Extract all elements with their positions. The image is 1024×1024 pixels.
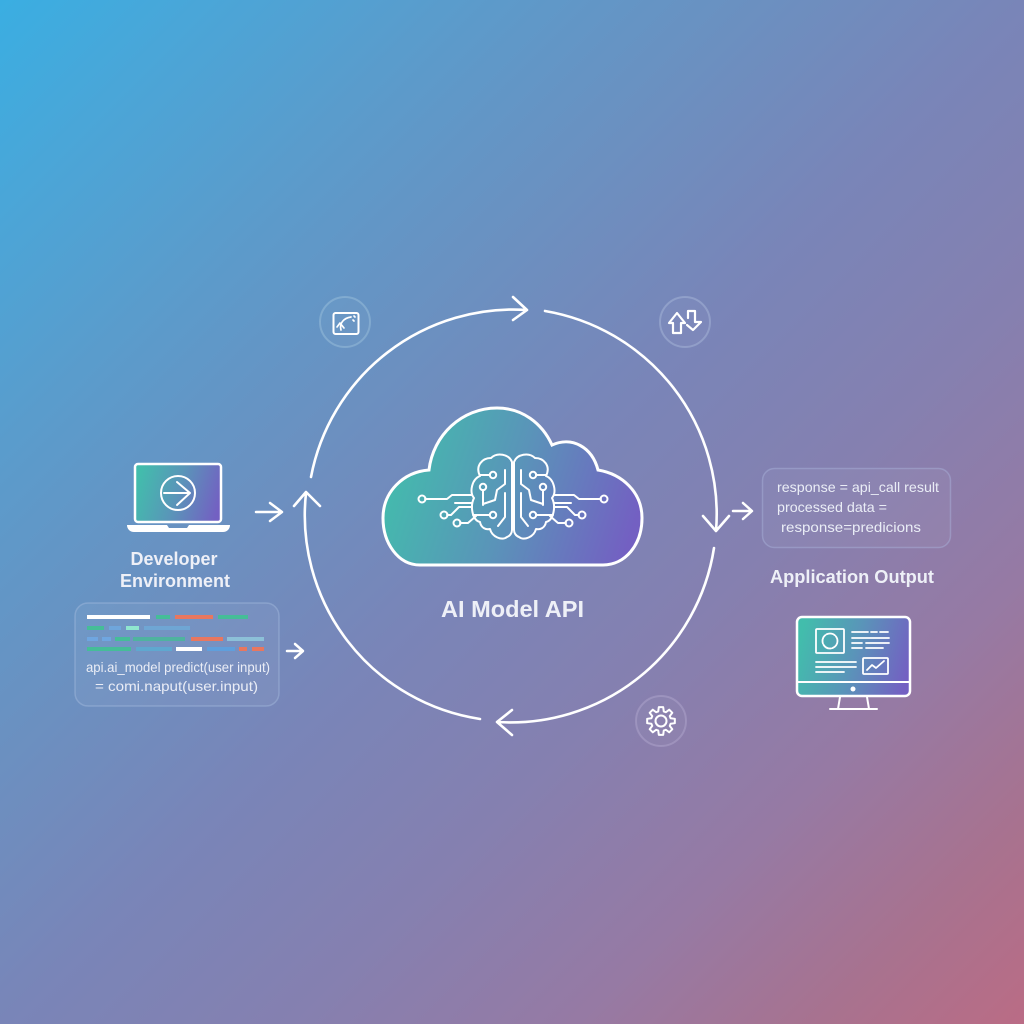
brain circuit xyxy=(418,455,608,539)
cycle ring with arrows xyxy=(294,297,729,735)
code bars xyxy=(87,615,264,651)
monitor stand xyxy=(830,697,877,709)
arrow: left arc xyxy=(294,492,480,719)
heading: Developer Environment: Developer xyxy=(130,549,218,569)
arrow: top arc xyxy=(311,297,527,477)
heading: Developer Environment xyxy=(120,549,230,591)
arrow: right arc xyxy=(545,311,729,531)
panel: response code: response=predicions xyxy=(781,519,921,535)
panel: response code xyxy=(762,468,950,548)
icon: cloud with circuit brain xyxy=(383,408,642,565)
panel box xyxy=(75,603,279,706)
icon: laptop xyxy=(127,464,230,532)
play arrow badge xyxy=(161,476,195,510)
panel: response code: response = api_call result xyxy=(777,479,939,495)
arrow: ring to output xyxy=(733,503,752,519)
icon: badge top-left xyxy=(320,297,370,347)
laptop base xyxy=(127,525,230,532)
panel: request code xyxy=(75,603,279,706)
heading: AI Model API: AI Model API xyxy=(441,596,584,622)
heading: Application Output: Application Output xyxy=(770,567,934,587)
icon: badge up and down arrows xyxy=(660,297,710,347)
code text: api.ai_model predict(user input) xyxy=(86,659,270,675)
panel: response code: processed data = xyxy=(777,499,887,515)
arrow: code to ring xyxy=(287,644,303,658)
icon: desktop monitor xyxy=(797,617,910,709)
panel: request code: = comi.naput(user.input) xyxy=(95,678,258,694)
brain right half xyxy=(514,455,608,539)
brain left half xyxy=(418,455,512,539)
laptop screen xyxy=(135,464,221,522)
cloud shape xyxy=(383,408,642,565)
icon: badge gear xyxy=(636,696,686,746)
arrow: bottom arc xyxy=(497,548,714,735)
heading: Developer Environment: Environment xyxy=(120,571,230,591)
arrow: developer to ring xyxy=(256,503,282,521)
screen contents xyxy=(816,629,889,674)
monitor body xyxy=(797,617,910,696)
